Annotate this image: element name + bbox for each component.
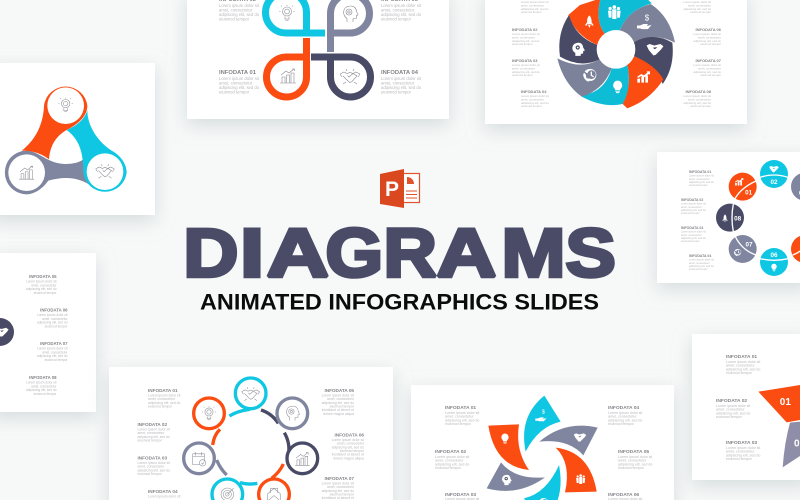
white disc: right (87, 153, 123, 190)
text: infodata 08: adipiscing elit, sed do (26, 388, 57, 392)
text: infodata 02: eiusmod tempor (512, 42, 533, 46)
card background (0, 63, 155, 215)
cyan lobe (67, 110, 127, 192)
blade: orange right (556, 448, 597, 492)
tail: cyan (229, 409, 250, 416)
arrow diagram (758, 385, 800, 467)
text: infodata 01: adipiscing elit, sed do (521, 7, 549, 11)
text: infodata 07: adipiscing elit, sed do (322, 489, 354, 493)
icon: mail (268, 488, 280, 500)
text: infodata 04: eiusmod tempor (521, 104, 542, 108)
icon: people (576, 474, 585, 484)
subtitle: ANIMATED INFOGRAPHICS SLIDES (200, 290, 599, 314)
blade: grey right (539, 426, 598, 455)
title: I (240, 214, 264, 291)
text: infodata 02: adipiscing elit, sed do (138, 435, 170, 439)
text: infodata 08: eiusmod tempor (34, 392, 57, 396)
text: infodata 02: adipiscing elit, sed do (716, 411, 750, 415)
card background (485, 0, 747, 124)
circle 08: 08 (734, 216, 742, 223)
text: infodata 03: amet, consectetur (138, 465, 165, 469)
text: infodata 03: Lorem ipsum dolor sit (681, 230, 706, 234)
text: infodata 01: Lorem ipsum dolor sit (445, 411, 479, 415)
panel: left slide (0, 63, 155, 215)
icon: dollar hand (535, 417, 547, 421)
text: infodata 06: INFODATA 06 (608, 492, 639, 498)
text: infodata 05: INFODATA 05 (29, 274, 57, 279)
text: infodata 05: Lorem ipsum dolor sit (683, 0, 711, 4)
text: infodata 03: eiusmod tempor (681, 239, 700, 243)
loop: orange (266, 38, 306, 97)
text: dollar sign: $ (542, 410, 546, 416)
text: infodata 02: amet, consectetur (435, 459, 464, 463)
text: infodata 07: INFODATA 07 (40, 341, 68, 346)
text: infodata 03: INFODATA 03 (138, 456, 167, 461)
icon: powerpoint logo: P (385, 178, 399, 201)
blade: grey top right (616, 4, 675, 49)
text: infodata 05: Lorem ipsum dolor sit (322, 394, 354, 398)
icon: handshake (96, 164, 114, 178)
text: infodata 05: amet, consectetur (327, 397, 355, 401)
text: infodata 07: eiusmod tempor (700, 73, 721, 77)
icon: chart (295, 453, 310, 465)
text: infodata 04: adipiscing elit, sed do (689, 264, 714, 268)
text: infodata 06: INFODATA 06 (334, 433, 364, 438)
text: infodata 01: adipiscing elit, sed do (445, 418, 479, 422)
icon: chart (19, 166, 34, 179)
text: infodata 05: eiusmod tempor (330, 404, 355, 408)
blade: orange left (488, 424, 529, 470)
text: infodata 03: INFODATA 03 (726, 440, 757, 446)
text: infodata 04: amet, consectetur (381, 80, 415, 86)
tail: cyan bottom (240, 483, 257, 484)
title: G (326, 214, 383, 291)
text: infodata 02: amet, consectetur (681, 205, 702, 209)
text: infodata 07: Lorem ipsum dolor sit (322, 482, 354, 486)
text: infodata 08: Lorem ipsum dolor sit (683, 94, 711, 98)
text: infodata 01: Lorem ipsum dolor sit (726, 360, 760, 364)
text: infodata 03: eiusmod tempor (381, 16, 412, 22)
text: infodata 03: adipiscing elit, sed do (726, 453, 760, 457)
text: infodata 02: INFODATA 02 (435, 449, 466, 455)
panel: bottom left slide (109, 367, 393, 500)
tail: grey (261, 410, 278, 423)
title: A (266, 214, 329, 291)
text: infodata 04: adipiscing elit, sed do (608, 418, 642, 422)
text: infodata 02: eiusmod tempor (219, 16, 250, 22)
text: infodata 05: eiusmod tempor (690, 10, 711, 14)
text: infodata 01: eiusmod tempor (726, 371, 753, 375)
icon: chart (637, 71, 650, 83)
text: infodata 04: Lorem ipsum dolor sit (521, 94, 549, 98)
text: infodata 01: INFODATA 01 (689, 170, 711, 174)
text: infodata 04: amet, consectetur (689, 261, 710, 265)
ring diagram (184, 378, 318, 500)
title: R (384, 214, 437, 291)
text: infodata 01: INFODATA 01 (445, 405, 476, 411)
blade: dark left (559, 15, 616, 63)
blade: grey bottom left (557, 49, 616, 97)
text: infodata 05: INFODATA 05 (618, 449, 649, 455)
text: infodata 06: INFODATA 06 (40, 308, 68, 312)
text: infodata 01: eiusmod tempor (148, 404, 173, 408)
text: infodata 03: eiusmod tempor (512, 73, 533, 77)
text: infodata 05: incididunt ut labore et (322, 408, 354, 412)
text: infodata 08: adipiscing elit, sed do (683, 101, 711, 105)
tail: dark (284, 433, 289, 457)
circle 07: 07 (745, 242, 753, 249)
text: infodata 01: amet, consectetur (445, 415, 474, 419)
text: infodata 03: adipiscing elit, sed do (681, 236, 706, 240)
text: infodata 03: eiusmod tempor (138, 472, 163, 476)
text: infodata 04: eiusmod tempor (608, 422, 635, 426)
icon: handshake (647, 44, 663, 55)
text: infodata 06: amet, consectetur (42, 317, 68, 321)
icon: handshake (340, 69, 360, 84)
text: infodata 07: Lorem ipsum dolor sit (37, 346, 68, 350)
icon: powerpoint logo (380, 169, 420, 208)
ring circle: cyan (235, 378, 266, 409)
text: infodata 05: eiusmod tempor (34, 291, 57, 295)
text: infodata 06: INFODATA 06 (696, 27, 722, 32)
text: infodata 04: adipiscing elit, sed do (381, 85, 422, 90)
text: infodata 07: amet, consectetur (327, 485, 355, 489)
blade: orange top left (568, 0, 616, 49)
swirl diagram (557, 0, 675, 108)
clover diagram (266, 0, 370, 97)
text: infodata 08: Lorem ipsum dolor sit (26, 380, 57, 384)
text: infodata 03: Lorem ipsum dolor sit (726, 446, 760, 450)
text: infodata 05: eiusmod tempor (618, 466, 645, 470)
circle 06: 06 (770, 252, 778, 259)
panel: top right slide (485, 0, 747, 124)
text: infodata 01: INFODATA 01 (726, 354, 757, 360)
text: infodata 07: eiusmod tempor (330, 492, 355, 496)
panel: bottom middle slide (411, 385, 674, 500)
card background (109, 367, 393, 500)
text: infodata 02: INFODATA 02 (716, 398, 747, 404)
text: infodata 04: INFODATA 04 (148, 489, 178, 494)
icon: bulb (58, 98, 73, 112)
text: infodata 07: adipiscing elit, sed do (37, 354, 68, 358)
icon: head (287, 406, 300, 421)
text: infodata 04: amet, consectetur (521, 98, 544, 102)
text: infodata 06: adipiscing elit, sed do (693, 39, 721, 43)
icon: people (608, 5, 621, 19)
text: infodata 06: adipiscing elit, sed do (332, 445, 364, 449)
card background (0, 253, 96, 412)
text: infodata 04: INFODATA 04 (689, 254, 711, 258)
text: infodata 01: INFODATA 01 (219, 70, 257, 76)
title: S (566, 214, 616, 291)
icon: head (344, 6, 358, 22)
text: infodata 01: Lorem ipsum dolor sit (219, 76, 260, 81)
text: infodata 04: adipiscing elit, sed do (521, 101, 549, 105)
text: infodata 04: amet, consectetur (608, 415, 637, 419)
text: infodata 02: amet, consectetur (138, 431, 165, 435)
text: infodata 06: eiusmod tempor (340, 449, 365, 453)
text: infodata 01: adipiscing elit, sed do (689, 180, 714, 184)
text: infodata 01: eiusmod tempor (445, 422, 472, 426)
icon: target (221, 488, 234, 500)
text: infodata 07: adipiscing elit, sed do (693, 70, 721, 74)
circles diagram (716, 160, 800, 276)
text: infodata 02: amet, consectetur (716, 408, 745, 412)
panel: left lower slide (0, 253, 96, 412)
text: infodata 03: Lorem ipsum dolor sit (512, 63, 540, 67)
text: infodata 06: adipiscing elit, sed do (37, 320, 68, 324)
segment: orange 01 (758, 385, 800, 422)
text: infodata 03: adipiscing elit, sed do (512, 70, 540, 74)
text: infodata 06: dolore magna aliqua (333, 456, 364, 460)
icon: handshake (242, 387, 260, 401)
segment: purple grey 02 (783, 422, 800, 467)
text: infodata 04: eiusmod tempor (381, 90, 412, 94)
text: infodata 02: adipiscing elit, sed do (435, 462, 469, 466)
text: infodata 05: adipiscing elit, sed do (322, 401, 354, 405)
icon: bulb (279, 5, 295, 20)
text: infodata 03: eiusmod tempor (726, 457, 753, 461)
text: infodata 02: adipiscing elit, sed do (681, 208, 706, 212)
loop: cyan (266, 0, 325, 33)
text: infodata 02: Lorem ipsum dolor sit (681, 202, 706, 206)
loop: dark (311, 57, 370, 97)
ring circle: orange right (259, 479, 289, 500)
text: infodata 03: amet, consectetur (726, 450, 755, 454)
text: infodata 02: adipiscing elit, sed do (219, 12, 260, 17)
text: infodata 04: INFODATA 04 (521, 89, 547, 94)
icon: bulb (501, 434, 509, 444)
text: dollar sign: $ (645, 14, 650, 23)
text: infodata 01: eiusmod tempor (219, 90, 250, 94)
icon: phone clock (583, 69, 596, 82)
ring circle: orange left (194, 398, 224, 429)
text: infodata 04: INFODATA 04 (381, 70, 419, 76)
text: infodata 04: Lorem ipsum dolor sit (689, 258, 714, 262)
ring circle: grey (277, 398, 308, 429)
text: infodata 03: adipiscing elit, sed do (381, 12, 422, 17)
text: infodata 01: eiusmod tempor (689, 183, 708, 187)
text: infodata 07: Lorem ipsum dolor sit (693, 63, 721, 67)
text: infodata 03: INFODATA 03 (512, 58, 538, 63)
icon: head (502, 475, 512, 485)
ring circle: dark (287, 443, 318, 474)
text: infodata 01: Lorem ipsum dolor sit (148, 394, 180, 398)
icon: rocket (585, 15, 594, 28)
text: infodata 01: adipiscing elit, sed do (726, 367, 760, 371)
icon: handshake (574, 433, 586, 442)
card background (657, 152, 800, 283)
text: infodata 06: Lorem ipsum dolor sit (693, 32, 721, 36)
tail: grey left (217, 460, 227, 475)
text: infodata 01: Lorem ipsum dolor sit (521, 0, 549, 4)
text: infodata 07: INFODATA 07 (696, 58, 722, 63)
text: infodata 02: eiusmod tempor (435, 466, 462, 470)
text: infodata 05: dolore magna aliqua (323, 412, 354, 416)
text: infodata 03: Lorem ipsum dolor sit (381, 3, 422, 8)
text: infodata 06: amet, consectetur (337, 442, 365, 446)
text: infodata 04: Lorem ipsum dolor sit (608, 411, 642, 415)
text: infodata 06: incididunt ut labore et (332, 453, 364, 457)
tail: orange right (272, 464, 283, 478)
text: infodata 05: adipiscing elit, sed do (683, 7, 711, 11)
text: infodata 01: amet, consectetur (689, 177, 710, 181)
dark circle with handshake (0, 318, 14, 346)
pinwheel diagram (487, 396, 598, 500)
white disc: top (47, 87, 84, 124)
text: infodata 01: adipiscing elit, sed do (148, 401, 181, 405)
text: infodata 01: adipiscing elit, sed do (219, 85, 260, 90)
text: infodata 01: amet, consectetur (521, 4, 544, 8)
text: infodata 03: adipiscing elit, sed do (138, 468, 170, 472)
text: infodata 07: amet, consectetur (698, 66, 721, 70)
blade: cyan bottom (524, 465, 561, 500)
panel: bottom right slide (692, 334, 800, 480)
blade: dark right (616, 37, 673, 84)
text: infodata 05: adipiscing elit, sed do (618, 462, 652, 466)
tail: orange left (213, 429, 220, 445)
text: infodata 03: INFODATA 03 (681, 226, 703, 230)
text: infodata 04: Lorem ipsum dolor sit (148, 494, 180, 498)
text: infodata 08: INFODATA 08 (29, 375, 57, 380)
text: infodata 02: Lorem ipsum dolor sit (219, 3, 260, 8)
text: infodata 05: amet, consectetur (618, 459, 647, 463)
ring circle: grey left (184, 443, 214, 474)
text: infodata 01: Lorem ipsum dolor sit (689, 174, 714, 178)
text: infodata 04: INFODATA 04 (608, 405, 639, 411)
text: infodata 02: INFODATA 02 (138, 422, 167, 427)
text: infodata 02: eiusmod tempor (716, 415, 743, 419)
grey lobe (5, 151, 90, 194)
text: number 02 clipped: 0 (794, 439, 800, 450)
text: infodata 01: amet, consectetur (148, 397, 176, 401)
blade: cyan top (598, 0, 652, 49)
text: infodata 07: amet, consectetur (42, 350, 68, 354)
white disc: left (8, 154, 45, 191)
blade: cyan top (524, 396, 561, 452)
title: D (183, 214, 238, 291)
panel: top centre slide (187, 0, 449, 119)
text: infodata 03: INFODATA 03 (445, 492, 476, 498)
circle 05 (791, 235, 800, 263)
text: infodata 05: adipiscing elit, sed do (26, 287, 57, 291)
title: M (502, 214, 566, 291)
icon: phone clock (539, 498, 548, 500)
text: infodata 01: INFODATA 01 (148, 388, 178, 393)
text: infodata 08: INFODATA 08 (686, 89, 712, 94)
text: infodata 02: INFODATA 02 (681, 198, 703, 202)
text: infodata 01: amet, consectetur (726, 364, 755, 368)
loop: grey (330, 0, 369, 52)
text: infodata 02: eiusmod tempor (681, 211, 700, 215)
circle 01: 01 (745, 190, 753, 197)
blade: cyan bottom (582, 49, 629, 105)
text: infodata 02: Lorem ipsum dolor sit (435, 455, 469, 459)
text: infodata 02: Lorem ipsum dolor sit (512, 32, 540, 36)
text: infodata 02: INFODATA 02 (512, 27, 538, 32)
blade: orange bottom right (616, 49, 663, 108)
text: infodata 06: eiusmod tempor (45, 324, 68, 328)
text: infodata 03: amet, consectetur (681, 233, 702, 237)
icon: head (572, 43, 585, 56)
text: infodata 05: Lorem ipsum dolor sit (26, 280, 57, 284)
text: infodata 06: Lorem ipsum dolor sit (332, 438, 364, 442)
text: infodata 07: INFODATA 07 (324, 476, 354, 481)
text: infodata 03: Lorem ipsum dolor sit (138, 461, 170, 465)
text: infodata 03: amet, consectetur (512, 66, 535, 70)
centre hole (597, 30, 635, 69)
text: infodata 05: INFODATA 05 (324, 388, 354, 393)
text: infodata 03: amet, consectetur (381, 8, 415, 12)
title: A (436, 214, 496, 291)
icon: bulb (613, 81, 622, 93)
text: infodata 02: amet, consectetur (219, 8, 253, 12)
text: infodata 06: eiusmod tempor (700, 42, 721, 46)
icon: bulb (202, 406, 216, 420)
card background (692, 334, 800, 480)
ring circle: cyan bottom (212, 479, 243, 500)
circle 02: 02 (770, 179, 778, 186)
text: infodata 05: amet, consectetur (31, 283, 57, 287)
text: infodata 02: amet, consectetur (512, 36, 535, 40)
text: infodata 04: eiusmod tempor (689, 267, 708, 271)
card background (187, 0, 449, 119)
text: infodata 08: amet, consectetur (31, 384, 57, 388)
text: infodata 01: eiusmod tempor (521, 10, 542, 14)
text: infodata 02: Lorem ipsum dolor sit (716, 404, 750, 408)
card background (411, 385, 674, 500)
panel: right slide (657, 152, 800, 283)
text: infodata 07: eiusmod tempor (45, 358, 68, 362)
text: infodata 06: Lorem ipsum dolor sit (37, 313, 68, 317)
text: number 01: 01 (780, 397, 791, 408)
icon: chart (280, 69, 296, 83)
text: infodata 08: eiusmod tempor (690, 104, 711, 108)
icon: calendar (193, 452, 206, 466)
orange lobe (22, 87, 87, 159)
text: infodata 02: eiusmod tempor (138, 438, 163, 442)
text: infodata 02: adipiscing elit, sed do (512, 39, 540, 43)
blade: grey left (487, 462, 545, 491)
text: infodata 08: amet, consectetur (688, 98, 711, 102)
text: infodata 01: amet, consectetur (219, 80, 253, 86)
text: infodata 04: Lorem ipsum dolor sit (381, 76, 422, 81)
text: infodata 02: Lorem ipsum dolor sit (138, 428, 170, 432)
icon: dollar hand (637, 24, 652, 29)
trefoil diagram (5, 87, 127, 194)
text: infodata 05: amet, consectetur (688, 4, 711, 8)
text: infodata 05: Lorem ipsum dolor sit (618, 455, 652, 459)
text: infodata 06: amet, consectetur (698, 36, 721, 40)
